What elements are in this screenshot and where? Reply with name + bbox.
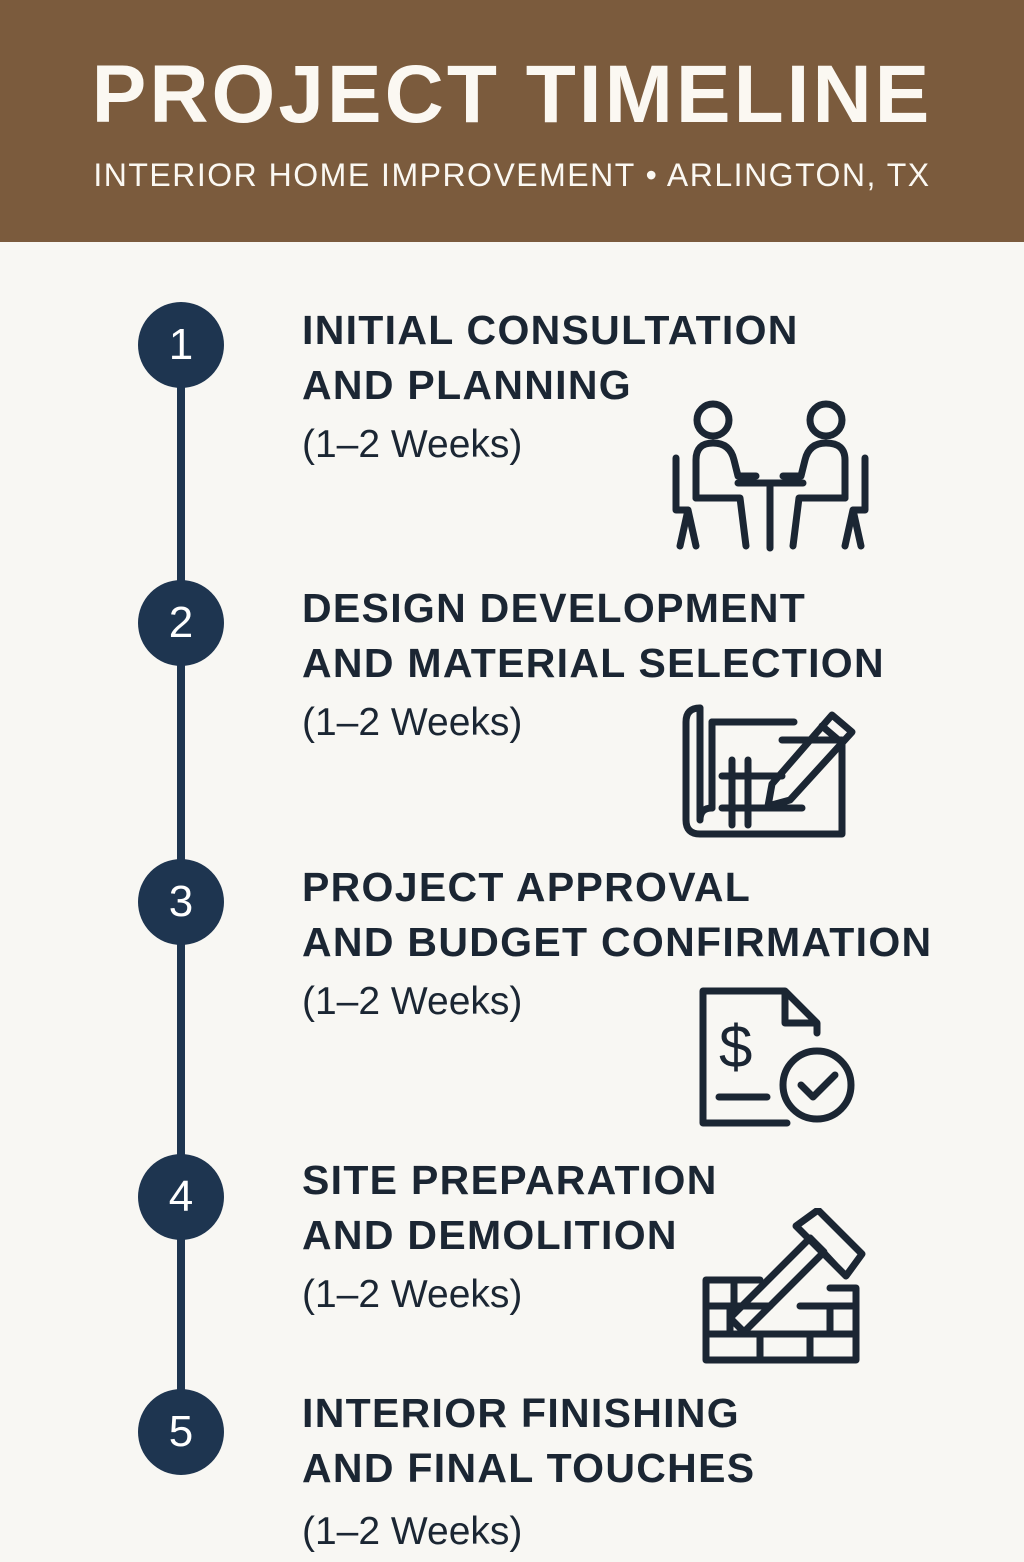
icon: blueprint with pencil (682, 704, 856, 838)
step 5 marker (138, 1389, 224, 1475)
step 5 marker: 5 (169, 1407, 193, 1456)
step 5 text (302, 1390, 755, 1553)
timeline line (177, 345, 185, 1435)
header banner (0, 0, 1024, 242)
step 5 text: (1–2 Weeks) (302, 1510, 522, 1553)
step 4 text: (1–2 Weeks) (302, 1273, 522, 1316)
step 2 text (302, 585, 885, 744)
step 2 marker (138, 580, 224, 666)
step 4 text (302, 1157, 718, 1316)
step 4 marker (138, 1154, 224, 1240)
step 3 text: AND BUDGET CONFIRMATION (302, 919, 932, 965)
step 2 text: AND MATERIAL SELECTION (302, 640, 885, 686)
step 5 text: INTERIOR FINISHING (302, 1390, 740, 1436)
step 4 text: AND DEMOLITION (302, 1212, 678, 1258)
step 1 text (302, 307, 799, 466)
step 3 text: (1–2 Weeks) (302, 980, 522, 1023)
step 4 marker: 4 (169, 1172, 193, 1221)
step 3 marker (138, 859, 224, 945)
step 1 marker (138, 302, 224, 388)
step 3 marker: 3 (169, 877, 193, 926)
step 2 text: DESIGN DEVELOPMENT (302, 585, 806, 631)
icon: hammer and bricks (702, 1208, 866, 1364)
step 4 text: SITE PREPARATION (302, 1157, 718, 1203)
title: PROJECT TIMELINE (92, 49, 932, 140)
step 3 text: PROJECT APPROVAL (302, 864, 751, 910)
step 5 text: AND FINAL TOUCHES (302, 1445, 755, 1491)
step 1 text: (1–2 Weeks) (302, 423, 522, 466)
step 2 text: (1–2 Weeks) (302, 701, 522, 744)
icon: budget document with check: $ (719, 1013, 752, 1080)
step 1 text: INITIAL CONSULTATION (302, 307, 799, 353)
icon: budget document with check (700, 988, 854, 1126)
step 1 text: AND PLANNING (302, 362, 632, 408)
step 3 text (302, 864, 932, 1023)
icon: meeting (672, 400, 868, 552)
step 1 marker: 1 (169, 320, 193, 369)
subtitle: INTERIOR HOME IMPROVEMENT • ARLINGTON, TX (93, 157, 931, 193)
step 2 marker: 2 (169, 598, 193, 647)
